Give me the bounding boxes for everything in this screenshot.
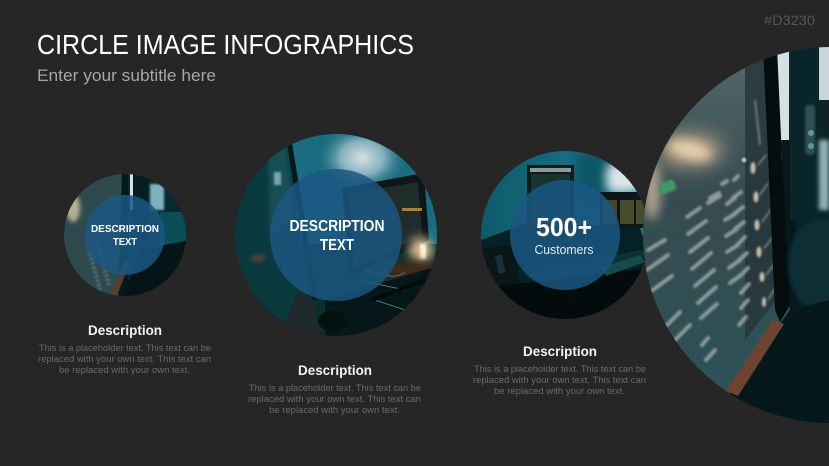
big number: 500+ bbox=[536, 212, 592, 242]
panel: circle two bbox=[235, 124, 439, 336]
body text: replaced with your own text. This text can bbox=[38, 354, 211, 364]
panel: circle one bbox=[64, 174, 186, 296]
body text: This is a placeholder text. This text can be bbox=[249, 383, 421, 393]
panel: description two bbox=[248, 362, 421, 415]
overlay circle bbox=[510, 180, 620, 290]
circle label: DESCRIPTION bbox=[91, 223, 159, 235]
slide code label: #D3230 bbox=[764, 13, 815, 28]
panel: description one bbox=[38, 322, 211, 375]
body text: be replaced with your own text. bbox=[59, 365, 190, 375]
heading: Description bbox=[523, 343, 597, 359]
heading: Description bbox=[88, 322, 162, 338]
body text: replaced with your own text. This text can bbox=[473, 375, 646, 385]
circle label line two: TEXT bbox=[320, 237, 354, 254]
heading: Description bbox=[298, 362, 372, 378]
body text: replaced with your own text. This text can bbox=[248, 394, 421, 404]
body text: This is a placeholder text. This text can be bbox=[474, 364, 646, 374]
body text: be replaced with your own text. bbox=[494, 386, 625, 396]
blurred data rows bbox=[647, 176, 749, 360]
circle label line two: TEXT bbox=[113, 236, 138, 248]
title: CIRCLE IMAGE INFOGRAPHICS bbox=[37, 29, 414, 60]
photo: medium circle bbox=[235, 124, 439, 336]
body text bbox=[248, 383, 421, 415]
subtitle: Enter your subtitle here bbox=[37, 66, 216, 85]
customers label: Customers bbox=[534, 243, 594, 257]
body text bbox=[38, 343, 211, 375]
body text: be replaced with your own text. bbox=[269, 405, 400, 415]
photo: customers circle bbox=[480, 151, 650, 319]
overlay circle bbox=[270, 169, 402, 301]
body text: This is a placeholder text. This text can be bbox=[39, 343, 211, 353]
large photo circle bbox=[640, 45, 829, 425]
panel: description three bbox=[473, 343, 646, 396]
sidebar avatars bbox=[750, 162, 766, 307]
overlay circle bbox=[85, 195, 165, 275]
body text bbox=[473, 364, 646, 396]
photo: small circle bbox=[64, 174, 186, 296]
panel: circle three bbox=[480, 151, 650, 319]
circle label: DESCRIPTION bbox=[290, 218, 384, 235]
